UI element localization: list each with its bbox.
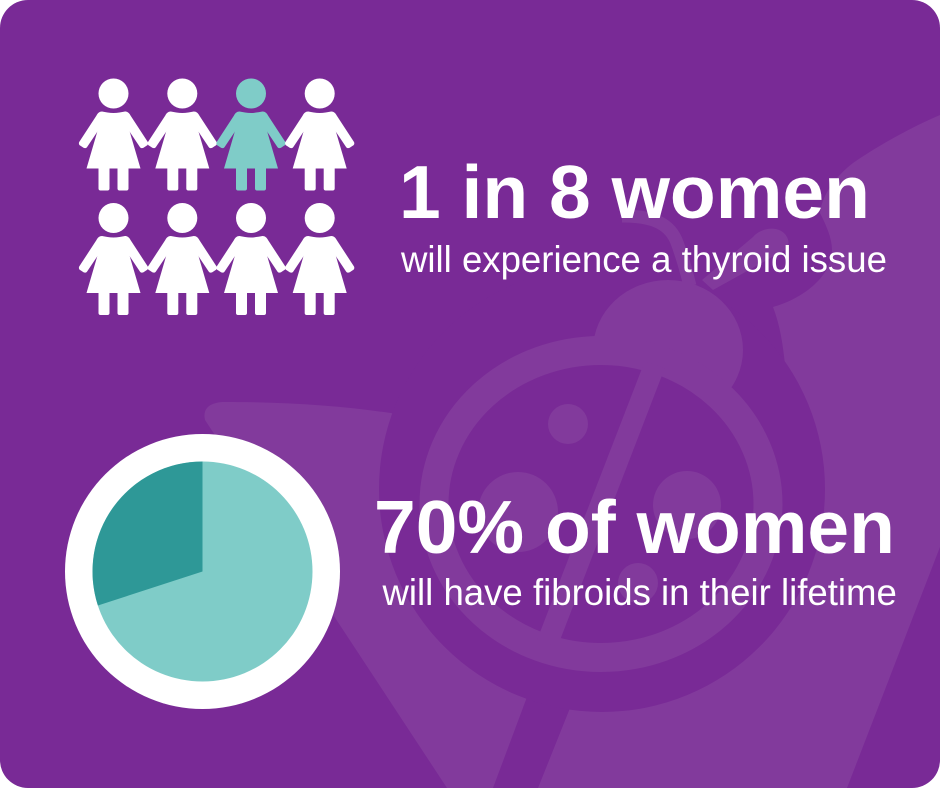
background watermark: reproductive system xyxy=(204,115,940,788)
pie chart: 70 percent xyxy=(65,434,340,709)
heading: 1 in 8 women: 1 in 8 women xyxy=(399,150,870,234)
heading: 70% of women: 70% of women xyxy=(374,485,895,569)
icon: row of eight women, one highlighted xyxy=(79,78,354,315)
text: fibroids: will have fibroids in their lifetime xyxy=(382,572,897,613)
text: thyroid issue: will experience a thyroid issue xyxy=(400,239,887,280)
